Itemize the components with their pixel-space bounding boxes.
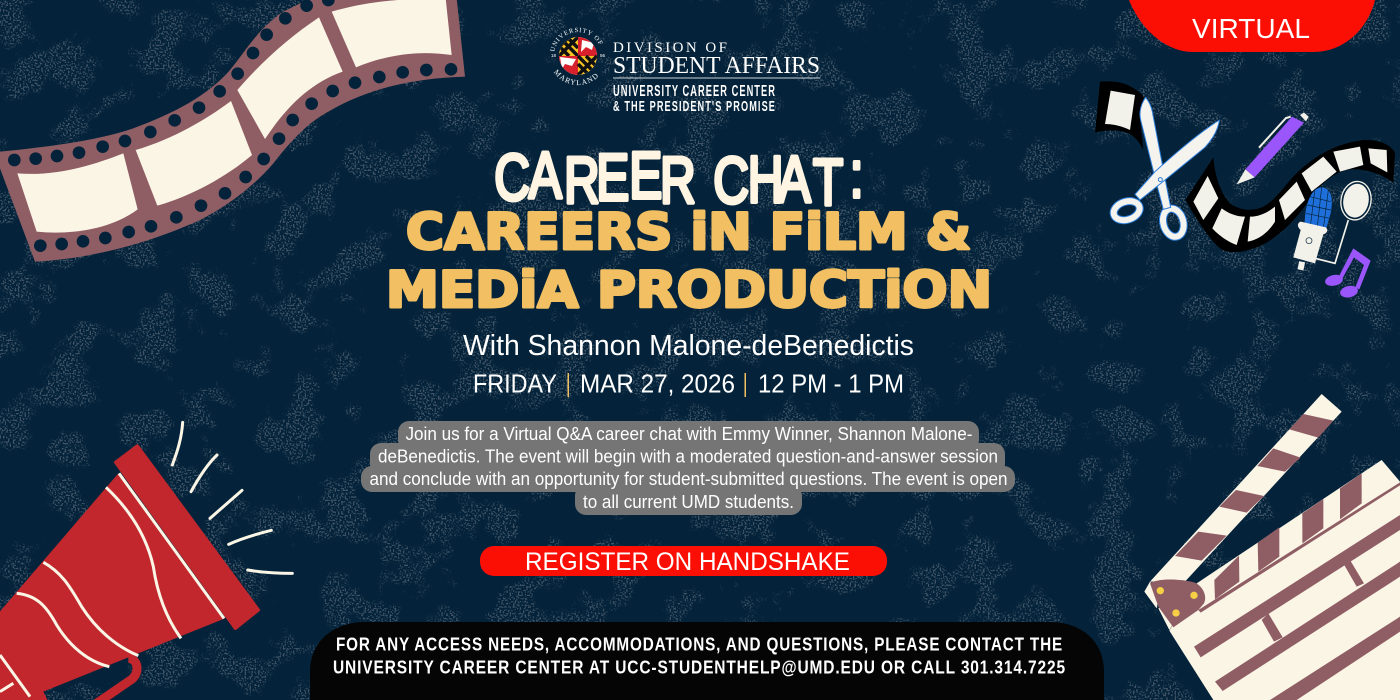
icon: megaphone	[0, 422, 292, 700]
virtual badge	[1129, 0, 1375, 52]
logo: University of Maryland Division of Student Affairs: STUDENT AFFAIRS	[613, 53, 820, 79]
icon: Maryland globe seal	[550, 28, 606, 86]
description block: and conclude with an opportunity for student-submitted questions. The event is open	[370, 469, 1008, 489]
icon: curving film strip	[1185, 140, 1395, 252]
icon: pen	[1237, 113, 1309, 184]
virtual badge: VIRTUAL	[1192, 13, 1310, 44]
contact footer band	[310, 622, 1104, 700]
icon: microphone with pop filter	[1293, 179, 1374, 271]
icon: film clapperboard	[1144, 394, 1400, 700]
description block: Join us for a Virtual Q&A career chat with Emmy Winner, Shannon Malone-	[406, 424, 972, 444]
logo: University of Maryland Division of Student Affairs: UNIVERSITY CAREER CENTER	[613, 83, 776, 100]
contact footer band: FOR ANY ACCESS NEEDS, ACCOMMODATIONS, AND QUESTIONS, PLEASE CONTACT THE	[336, 634, 1063, 654]
icon: Maryland globe seal: UNIVERSITY OF	[550, 28, 603, 51]
logo: University of Maryland Division of Student Affairs: DIVISION OF	[613, 40, 727, 56]
icon: sound lines	[172, 422, 292, 573]
icon: scissors	[1111, 97, 1219, 239]
speaker line: With Shannon Malone-deBenedictis	[463, 330, 914, 362]
clapper stick	[1144, 394, 1342, 630]
heading: careers in film and media production	[386, 203, 992, 319]
clapper hinge	[1150, 579, 1205, 627]
description block: to all current UMD students.	[583, 492, 794, 512]
icon: Maryland globe seal: 56	[600, 53, 606, 58]
icon: Maryland globe seal: 18	[551, 53, 557, 58]
film strip top left	[0, 0, 465, 262]
contact footer band: UNIVERSITY CAREER CENTER AT UCC-STUDENTHELP@UMD.EDU OR CALL 301.314.7225	[333, 658, 1066, 678]
icon: film editing tools	[1095, 81, 1395, 299]
register button: REGISTER ON HANDSHAKE	[525, 548, 850, 576]
date and time: MAR 27, 2026	[580, 368, 735, 398]
icon: cut film piece	[1095, 81, 1144, 150]
date and time	[473, 368, 904, 398]
date and time: FRIDAY	[473, 368, 557, 398]
heading: career chat: CAREER CHAT:	[494, 138, 864, 220]
title	[386, 138, 992, 319]
logo: University of Maryland Division of Student Affairs	[550, 28, 820, 115]
logo: University of Maryland Division of Student Affairs: & THE PRESIDENT'S PROMISE	[613, 98, 776, 115]
date and time: 12 PM - 1 PM	[758, 368, 904, 398]
description block	[361, 421, 1015, 515]
heading: careers in film and media production: CAREERS iN FiLM &	[406, 203, 971, 261]
clapper board	[1169, 460, 1400, 700]
icon: music notes	[1324, 248, 1371, 299]
icon: Maryland globe seal: MARYLAND	[554, 69, 598, 86]
description block: deBenedictis. The event will begin with a moderated question-and-answer session	[378, 446, 998, 466]
heading: careers in film and media production: MEDiA PRODUCTiON	[386, 261, 992, 319]
